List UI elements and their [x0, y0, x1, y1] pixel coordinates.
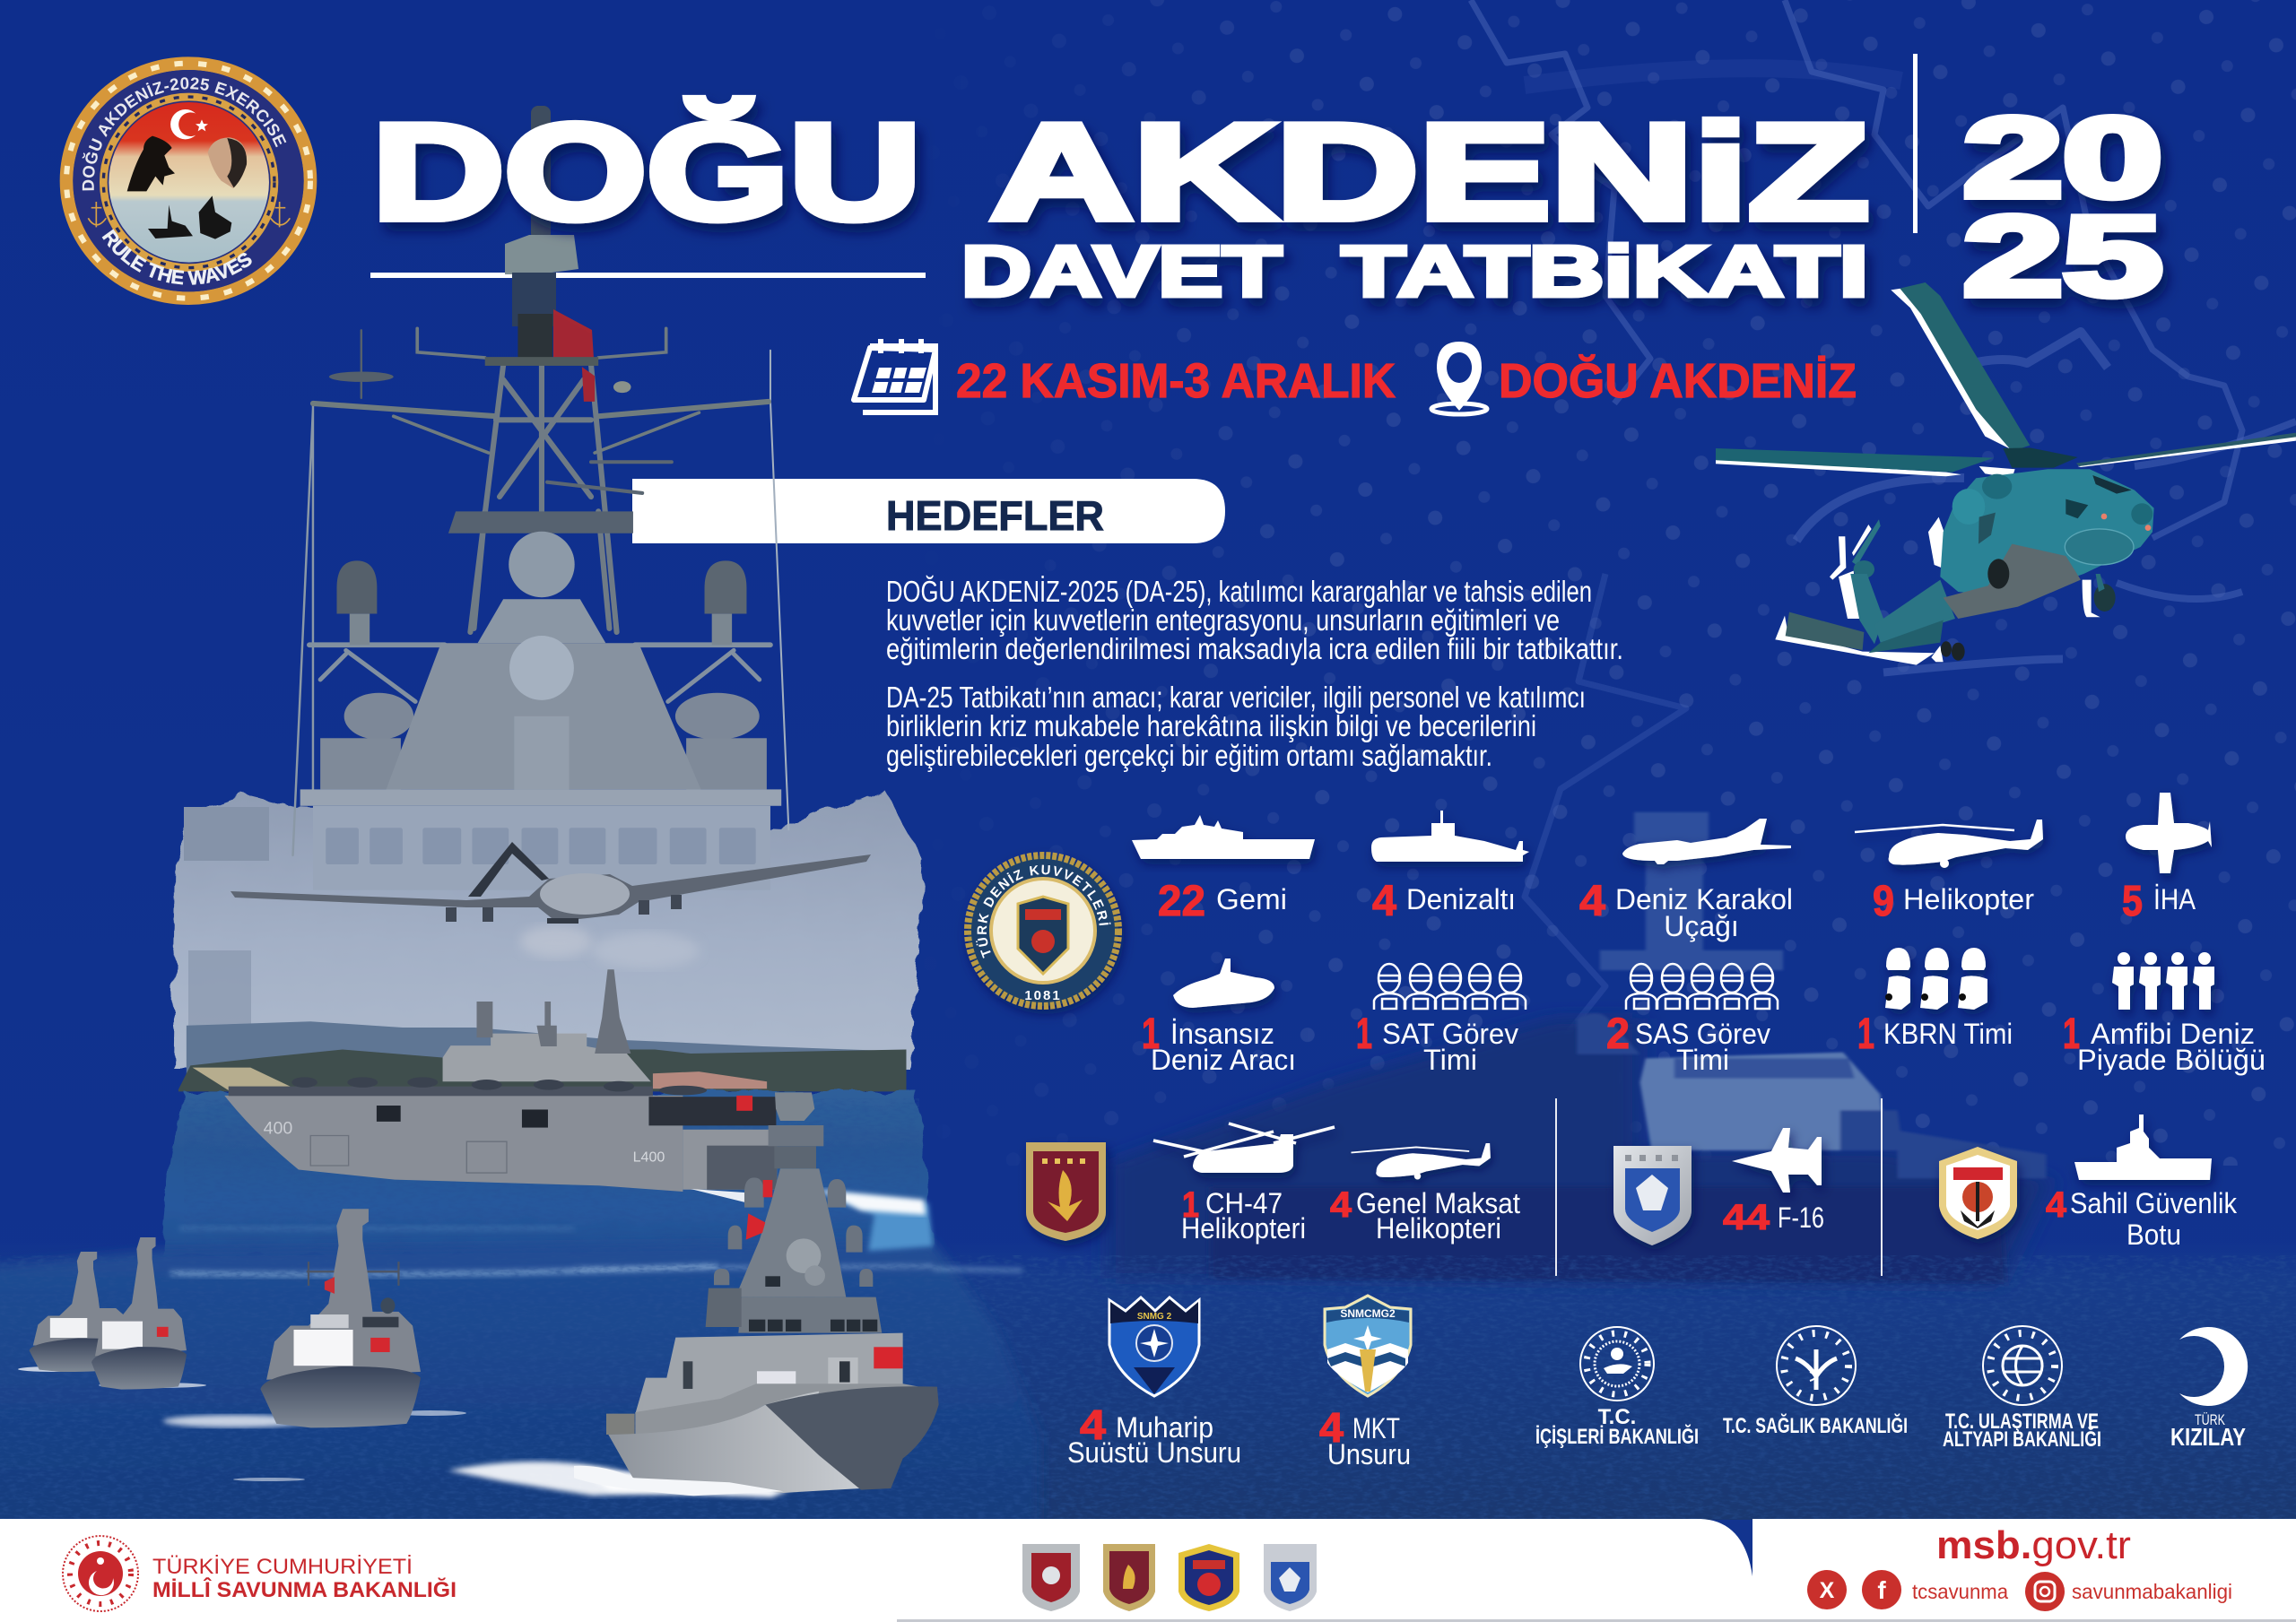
count: 2 SAS Görev Timi: Timi	[1676, 1044, 1729, 1076]
label: T.C. İçişleri Bakanlığı: İÇİŞLERİ BAKANLIĞI	[1535, 1424, 1699, 1449]
icon: coast guard boat	[2074, 1115, 2212, 1180]
icon: marine platoon	[2112, 952, 2214, 1010]
badge: Turkish Navy	[963, 852, 1128, 1019]
count: 4 Genel Maksat Helikopteri: 4	[1330, 1185, 1352, 1225]
title line 1: DOĞU	[372, 96, 921, 248]
logo: Ministry of Interior	[1580, 1327, 1654, 1401]
crescent in logo	[170, 109, 196, 139]
icon: Instagram	[2025, 1572, 2065, 1611]
title line 2	[961, 231, 1868, 311]
icon: general purpose helicopter	[1351, 1143, 1491, 1180]
icon: SAS team	[1626, 964, 1778, 1010]
background warship structure	[293, 314, 788, 890]
body paragraph 1: DOĞU AKDENİZ-2025 (DA-25), katılımcı karargahlar ve tahsis edilen	[886, 575, 1592, 608]
count: 4 Muharip Suüstü Unsuru: Muharip	[1116, 1411, 1213, 1444]
icon: unmanned sea vehicle	[1173, 958, 1274, 1008]
count: 9 Helikopter: 9	[1873, 878, 1894, 925]
footer: social links	[1807, 1570, 2232, 1611]
count: 22 Gemi: 22	[1158, 878, 1205, 925]
count: 44 F-16	[1723, 1198, 1824, 1237]
count: 4 Genel Maksat Helikopteri: Genel Maksat	[1356, 1187, 1520, 1219]
corvette centre	[260, 1209, 421, 1427]
main frigate	[574, 1092, 939, 1496]
pale sky and ghost superstructure	[172, 789, 924, 1067]
icon: ship	[1132, 815, 1315, 859]
hedefler heading: HEDEFLER	[886, 492, 1104, 539]
body paragraph 1	[886, 575, 1623, 665]
ministry name	[152, 1555, 457, 1602]
asset row 3	[1026, 1098, 2238, 1276]
count: 1 SAT Görev Timi: SAT Görev	[1382, 1018, 1518, 1050]
icon: helicopter	[1855, 820, 2043, 868]
count: 1 Amfibi Deniz Piyade Bölüğü: Amfibi Deniz	[2091, 1018, 2255, 1050]
title line 1	[372, 96, 1869, 248]
icon: location pin	[1431, 342, 1487, 414]
silhouette: Atatürk	[208, 137, 247, 188]
wake highlights	[18, 1189, 933, 1497]
logo: Ministry of Transport	[1983, 1326, 2062, 1405]
body paragraph 1: kuvvetler için kuvvetlerin entegrasyonu, unsurların eğitimleri ve	[886, 603, 1560, 637]
tail and stabiliser	[1775, 517, 1955, 665]
icon: F-16	[1732, 1128, 1822, 1193]
ministry name: TÜRKİYE CUMHURİYETİ	[152, 1555, 413, 1579]
count: 4 Sahil Güvenlik Botu: Sahil Güvenlik	[2070, 1187, 2238, 1219]
full-width sea	[0, 1242, 2296, 1520]
logo: Ministry of Health	[1777, 1326, 1856, 1405]
icon: CBRN team	[1885, 948, 1987, 1010]
body paragraph 2: birliklerin kriz mukabele harekâtına ilişkin bilgi ve becerilerini	[886, 709, 1536, 742]
count: 4 MKT Unsuru: MKT	[1352, 1412, 1400, 1444]
small corvette second	[91, 1237, 187, 1390]
count: 4 Denizaltı: Denizaltı	[1406, 883, 1516, 915]
count: 2 SAS Görev Timi: SAS Görev	[1635, 1018, 1770, 1050]
upper sea in photo	[161, 1091, 933, 1255]
count: 5 İHA	[2122, 878, 2196, 925]
footer: service badges	[1022, 1544, 1317, 1611]
count: 1 İnsansız Deniz Aracı	[1142, 1010, 1296, 1076]
count: 1 SAT Görev Timi: 1	[1356, 1010, 1372, 1058]
logo: Doğu Akdeniz-2025 exercise	[59, 56, 317, 305]
count: 5 İHA: İHA	[2153, 883, 2196, 915]
sea texture	[0, 1255, 2296, 1519]
year: 20	[1963, 94, 2162, 221]
icon: UAV top view	[2126, 793, 2212, 873]
count: 22 Gemi: Gemi	[1216, 883, 1287, 915]
label: T.C. Ulaştırma ve Altyapı Bakanlığı: ALTYAPI BAKANLIĞI	[1943, 1427, 2101, 1452]
badge: Air Force small	[1264, 1544, 1317, 1611]
count: 1 KBRN Timi: 1	[1857, 1010, 1874, 1058]
landing gear	[1931, 559, 2116, 662]
icon: calendar	[854, 339, 935, 412]
title underline	[370, 273, 926, 278]
badge: SNMCMG2	[1325, 1296, 1411, 1396]
count: 4 MKT Unsuru: 4	[1319, 1404, 1344, 1451]
distant mountains and land	[178, 1021, 906, 1091]
count: 4 Sahil Güvenlik Botu	[2046, 1185, 2238, 1251]
logo ring text bottom: RULE THE WAVES	[102, 230, 252, 285]
shield title: SNMCMG2	[1340, 1307, 1396, 1320]
count: 4 Sahil Güvenlik Botu: Botu	[2126, 1219, 2181, 1251]
count: 1 CH-47 Helikopteri	[1181, 1185, 1306, 1245]
amphibious ship L400: 400	[264, 1118, 292, 1138]
shield title: SNMG 2	[1137, 1312, 1172, 1322]
engine and belly	[1944, 474, 2081, 619]
anchors	[88, 202, 290, 227]
count: 4 Sahil Güvenlik Botu: 4	[2046, 1185, 2067, 1225]
icon: CH-47	[1153, 1123, 1335, 1173]
count: 2 SAS Görev Timi	[1606, 1010, 1770, 1076]
silhouette: ships	[148, 195, 231, 239]
UAV	[230, 842, 871, 924]
count: 1 İnsansız Deniz Aracı: 1	[1142, 1010, 1160, 1058]
navy year: 1081	[1024, 988, 1062, 1003]
count: 44 F-16: 44	[1723, 1198, 1770, 1237]
count: 1 CH-47 Helikopteri: CH-47	[1205, 1187, 1283, 1219]
badge: Land Forces	[1026, 1142, 1106, 1241]
fuselage	[1940, 469, 2154, 598]
sea texture photo	[184, 1098, 919, 1255]
icon: submarine	[1371, 811, 1529, 862]
date text: 22 KASIM-3 ARALIK	[956, 354, 1396, 408]
label: Türk Kızılay	[2170, 1411, 2246, 1451]
icon: SAT team	[1374, 964, 1526, 1010]
count: 1 Amfibi Deniz Piyade Bölüğü: 1	[2063, 1010, 2080, 1058]
count: 1 Amfibi Deniz Piyade Bölüğü: Piyade Bölüğü	[2077, 1044, 2266, 1076]
handle: tcsavunma: tcsavunma	[1912, 1580, 2008, 1603]
label: Türk Kızılay: TÜRK	[2195, 1411, 2225, 1428]
badge: Coast Guard	[1939, 1147, 2017, 1239]
label: T.C. İçişleri Bakanlığı: T.C.	[1598, 1405, 1636, 1429]
count: 9 Helikopter	[1873, 878, 2034, 925]
count: 2 SAS Görev Timi: 2	[1606, 1010, 1630, 1058]
badge: SNMG2	[1109, 1297, 1199, 1396]
location text: DOĞU AKDENİZ	[1499, 354, 1857, 408]
count: 9 Helikopter: Helikopter	[1903, 883, 2034, 915]
count: 1 CH-47 Helikopteri: 1	[1182, 1185, 1199, 1225]
body paragraph 2	[886, 681, 1586, 772]
count: 4 Muharip Suüstü Unsuru: Suüstü Unsuru	[1067, 1436, 1241, 1469]
icon: X	[1807, 1570, 1847, 1609]
divider	[1555, 1098, 1557, 1276]
handle: savunmabakanligi: savunmabakanligi	[2072, 1580, 2232, 1603]
count: 4 Muharip Suüstü Unsuru: 4	[1080, 1401, 1106, 1448]
amphibious ship L400	[193, 969, 777, 1192]
footer: web address: msb.gov.tr	[1936, 1523, 2131, 1567]
silhouette: Barbarossa	[127, 136, 175, 191]
amphibious ship L400: L400	[633, 1149, 665, 1166]
badge: Land Forces small	[1103, 1544, 1155, 1611]
count: 4 Genel Maksat Helikopteri	[1330, 1185, 1520, 1245]
count: 1 KBRN Timi	[1857, 1010, 2013, 1058]
label: Türk Kızılay: KIZILAY	[2170, 1423, 2246, 1451]
background warship mast top	[505, 106, 594, 359]
icon: Facebook	[1862, 1570, 1901, 1609]
count: 1 Amfibi Deniz Piyade Bölüğü	[2063, 1010, 2266, 1076]
year: 25	[1963, 193, 2162, 319]
badge: Air Force	[1613, 1146, 1692, 1245]
title line 1: AKDENiZ	[990, 96, 1869, 248]
count: 1 SAT Görev Timi: Timi	[1423, 1044, 1477, 1076]
count: 1 CH-47 Helikopteri: Helikopteri	[1181, 1212, 1306, 1245]
hedefler pill	[632, 479, 1225, 543]
label: T.C. Ulaştırma ve Altyapı Bakanlığı	[1943, 1409, 2101, 1452]
small corvette far left	[30, 1252, 130, 1372]
navy ring text: TÜRK DENİZ KUVVETLERİ	[976, 864, 1110, 958]
icon: Facebook: f	[1877, 1576, 1886, 1604]
body paragraph 2: DA-25 Tatbikatı’nın amacı; karar vericiler, ilgili personel ve katılımcı	[886, 681, 1586, 714]
count: 5 İHA: 5	[2122, 878, 2143, 925]
crescent star	[196, 119, 208, 131]
badge: General Staff	[1022, 1544, 1080, 1611]
label: T.C. İçişleri Bakanlığı	[1535, 1405, 1699, 1449]
asset row 2	[1142, 948, 2266, 1076]
count: 4 Genel Maksat Helikopteri: Helikopteri	[1376, 1212, 1501, 1245]
logo: Red Crescent	[2179, 1327, 2248, 1406]
label: T.C. Sağlık Bakanlığı: T.C. SAĞLIK BAKANLIĞI	[1723, 1413, 1908, 1438]
date and location row	[854, 339, 1857, 414]
ghost warship on right	[1108, 812, 2052, 1287]
count: 22 Gemi	[1158, 878, 1287, 925]
count: 1 KBRN Timi: KBRN Timi	[1883, 1018, 2013, 1050]
count: 4 Muharip Suüstü Unsuru	[1067, 1401, 1241, 1469]
count: 4 MKT Unsuru: Unsuru	[1327, 1438, 1411, 1470]
label: T.C. Ulaştırma ve Altyapı Bakanlığı: T.C. ULAŞTIRMA VE	[1945, 1409, 2099, 1434]
rotor blades	[1716, 282, 2296, 478]
sea-coloured notch and footer	[0, 1519, 2296, 1622]
count: 1 İnsansız Deniz Aracı: İnsansız	[1170, 1018, 1274, 1050]
divider	[1881, 1098, 1883, 1276]
count: 4 Deniz Karakol Uçağı: 4	[1579, 878, 1605, 925]
title line 2: DAVET	[961, 231, 1282, 311]
badge: Naval Forces small	[1178, 1544, 1239, 1611]
body paragraph 2: geliştirebilecekleri gerçekçi bir eğitim ortamı sağlamaktır.	[886, 739, 1492, 772]
ministry name: MİLLÎ SAVUNMA BAKANLIĞI	[152, 1577, 457, 1602]
title divider	[1913, 54, 1918, 233]
asset row 1	[1132, 793, 2212, 942]
count: 4 Denizaltı: 4	[1372, 878, 1396, 925]
sea in photo lower	[0, 1242, 1040, 1578]
sea streaks	[170, 1228, 1022, 1274]
background dots	[1071, 0, 2296, 1166]
count: 4 Deniz Karakol Uçağı: Deniz Karakol	[1615, 883, 1793, 915]
asset row 4: NATO and ministries	[1067, 1296, 2248, 1470]
count: 4 MKT Unsuru	[1319, 1404, 1411, 1470]
nose and radome	[2065, 475, 2152, 565]
body paragraph 1: eğitimlerin değerlendirilmesi maksadıyla icra edilen fiili bir tatbikattır.	[886, 632, 1623, 665]
ghost side blocks and clouds	[184, 807, 700, 1049]
footer: ministry logo	[63, 1536, 457, 1611]
logo ring text top: DOĞU AKDENİZ-2025 EXERCISE	[83, 77, 287, 190]
count: 4 Deniz Karakol Uçağı: Uçağı	[1664, 910, 1739, 942]
icon: patrol aircraft	[1622, 819, 1791, 864]
count: 1 İnsansız Deniz Aracı: Deniz Aracı	[1151, 1044, 1296, 1076]
emblem	[63, 1536, 138, 1611]
count: 1 SAT Görev Timi	[1356, 1010, 1518, 1076]
count: 4 Deniz Karakol Uçağı	[1579, 878, 1793, 942]
map outline watermark	[1471, 0, 2296, 1076]
count: 4 Denizaltı	[1372, 878, 1516, 925]
icon: X: X	[1820, 1578, 1835, 1603]
Atatürk hair shade	[227, 138, 247, 187]
count: 44 F-16: F-16	[1778, 1201, 1824, 1234]
year	[1963, 94, 2162, 319]
title line 2: TATBiKATI	[1342, 231, 1868, 311]
helicopter photo	[1716, 282, 2296, 665]
